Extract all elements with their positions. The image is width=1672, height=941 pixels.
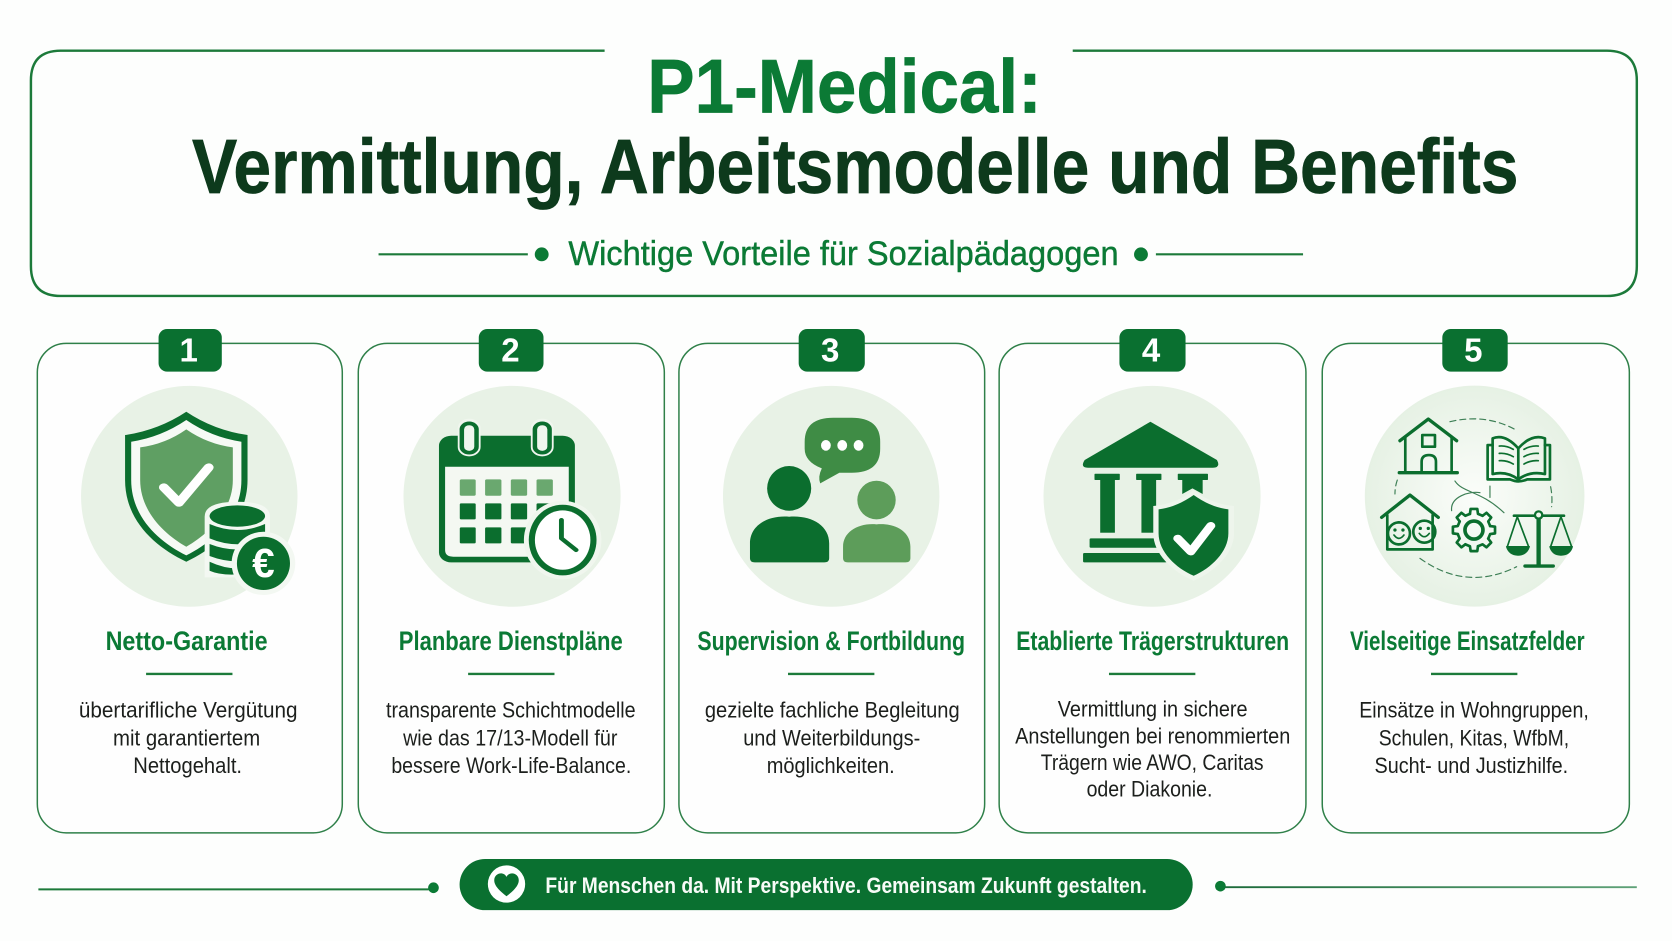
title: second line: Vermittlung, Arbeitsmodelle und Benefits xyxy=(192,125,1518,210)
footer slogan: Für Menschen da. Mit Perspektive. Gemeinsam Zukunft gestalten. xyxy=(545,873,1147,898)
card title: Netto-Garantie xyxy=(106,625,268,656)
card title: Etablierte Trägerstrukturen xyxy=(1016,625,1289,656)
house xyxy=(1399,419,1457,473)
card title: Planbare Dienstpläne xyxy=(399,625,623,656)
badge 1: 1 xyxy=(180,333,198,370)
card text: Einsätze in Wohngruppen, xyxy=(1359,697,1589,722)
icon: calendar with clock xyxy=(403,386,621,607)
card text: übertarifliche Vergütung xyxy=(79,697,298,722)
scales xyxy=(1507,511,1572,566)
badge 5: 5 xyxy=(1464,333,1483,370)
home with smiling faces xyxy=(1382,495,1438,549)
panel: card 2 Planbare Dienstpläne xyxy=(358,329,664,833)
badge 4 xyxy=(1119,329,1186,372)
icon: institution building with shield xyxy=(1044,386,1261,607)
card text xyxy=(705,697,960,778)
badge 4: 4 xyxy=(1142,333,1161,370)
header panel xyxy=(31,44,1637,296)
card text: Trägern wie AWO, Caritas xyxy=(1041,750,1264,775)
card text: Nettogehalt. xyxy=(133,753,242,778)
card text: Sucht- und Justizhilfe. xyxy=(1374,753,1568,778)
panel: card 5 Vielseitige Einsatzfelder xyxy=(1322,329,1629,833)
card text: möglichkeiten. xyxy=(767,753,895,778)
badge 1 xyxy=(159,329,222,372)
card title: Supervision & Fortbildung xyxy=(697,625,965,656)
panel: card 1 Netto-Garantie xyxy=(37,329,342,833)
subtitle with ornaments xyxy=(379,235,1303,273)
badge 2: 2 xyxy=(501,333,520,370)
card text: bessere Work-Life-Balance. xyxy=(391,753,631,778)
card text xyxy=(79,697,298,778)
card text: Vermittlung in sichere xyxy=(1058,697,1248,722)
card text xyxy=(1359,697,1589,778)
card text xyxy=(1015,697,1290,802)
badge 2 xyxy=(479,329,544,372)
footer banner xyxy=(38,859,1637,910)
card text: transparente Schichtmodelle xyxy=(386,697,636,722)
card text: und Weiterbildungs- xyxy=(743,725,920,750)
icon: heart xyxy=(488,865,525,903)
card text: Anstellungen bei renommierten xyxy=(1015,723,1290,748)
card text: mit garantiertem xyxy=(113,725,260,750)
card title: Vielseitige Einsatzfelder xyxy=(1350,625,1585,656)
badge 3 xyxy=(799,329,865,372)
badge 3: 3 xyxy=(821,333,839,370)
card text: gezielte fachliche Begleitung xyxy=(705,697,960,722)
icon: fields of work cluster xyxy=(1365,386,1584,607)
title: P1-Medical: P1-Medical: xyxy=(647,44,1042,129)
book xyxy=(1488,437,1550,481)
icon: shield with euro coins: € xyxy=(252,540,275,586)
subtitle with ornaments: Wichtige Vorteile für Sozialpädagogen xyxy=(568,235,1119,273)
card text: oder Diakonie. xyxy=(1087,777,1212,802)
badge 5 xyxy=(1442,329,1508,372)
icon: shield with euro coins xyxy=(81,386,298,607)
card text xyxy=(386,697,636,778)
panel: card 3 Supervision & Fortbildung xyxy=(679,329,985,833)
gear xyxy=(1453,509,1495,551)
card text: Schulen, Kitas, WfbM, xyxy=(1379,725,1569,750)
card text: wie das 17/13-Modell für xyxy=(402,725,618,750)
panel: card 4 Etablierte Trägerstrukturen xyxy=(999,329,1306,833)
dashed connector ring xyxy=(1395,419,1552,577)
icon: two people talking xyxy=(723,386,939,607)
